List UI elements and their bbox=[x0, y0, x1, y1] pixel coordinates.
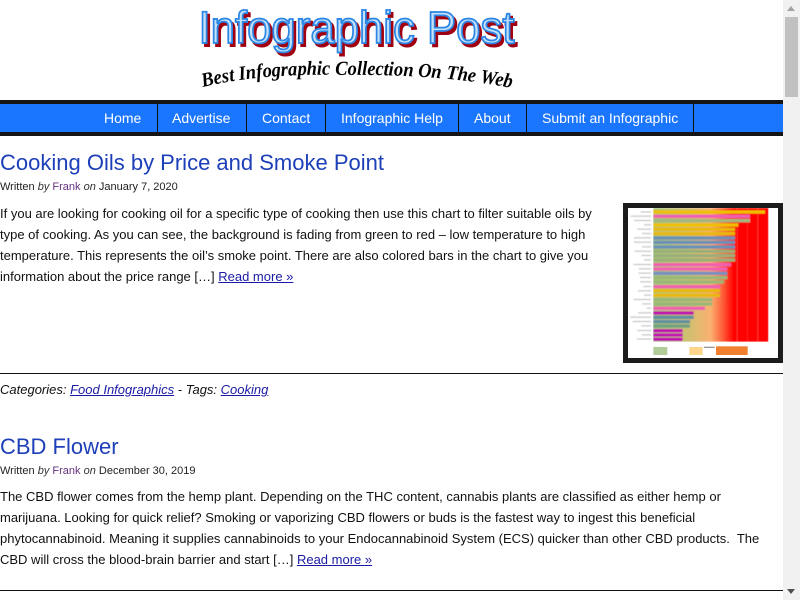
post 2 excerpt: The CBD flower comes from the hemp plant. Depending on the THC content, cannabis plants are classified as either hemp or bbox=[0, 489, 721, 504]
site logo: Infographic Post bbox=[198, 2, 515, 53]
nav item: Contact: Contact bbox=[262, 110, 310, 126]
post 1 byline: Written by Frank on January 7, 2020 bbox=[0, 181, 178, 193]
post 2 excerpt bbox=[0, 489, 759, 567]
post 2 excerpt: marijuana. Looking for quick relief? Smoking or vaporizing CBD flowers or buds is the fastest way to ingest this beneficial bbox=[0, 510, 695, 525]
post 2 excerpt: phytocannabinoid. Meaning it supplies cannabinoids to your Endocannabinoid System (ECS) quicker than other CBD products. The bbox=[0, 531, 759, 546]
scrollbar bbox=[783, 0, 800, 600]
nav item: Advertise: Advertise bbox=[172, 110, 230, 126]
site logo: Best Infographic Collection On The Web bbox=[202, 60, 512, 88]
post 1 excerpt: temperature. This represents the oil’s smoke point. There are also colored bars in the chart to give you bbox=[0, 248, 588, 263]
post 1 heading: Cooking Oils by Price and Smoke Point bbox=[0, 150, 384, 175]
nav item: About: About bbox=[474, 110, 511, 126]
post 1 excerpt: information about the price range […] Read more » bbox=[0, 269, 293, 284]
post 2 byline: Written by Frank on December 30, 2019 bbox=[0, 465, 196, 477]
post 1 thumbnail chart bbox=[623, 203, 783, 363]
nav item: Home: Home bbox=[104, 110, 141, 126]
post 1 excerpt: If you are looking for cooking oil for a specific type of cooking then use this chart to filter suitable oils by bbox=[0, 206, 592, 221]
post 1 excerpt: type of cooking. As you can see, the background is fading from green to red – low temperature to high bbox=[0, 227, 585, 242]
navigation bar bbox=[0, 100, 783, 136]
post 1 categories and tags: Categories: Food Infographics - Tags: Cooking bbox=[0, 382, 268, 397]
nav item: Infographic Help: Infographic Help bbox=[341, 110, 443, 126]
post 2 heading: CBD Flower bbox=[0, 434, 119, 459]
post 1 excerpt bbox=[0, 206, 592, 284]
site logo bbox=[198, 2, 518, 88]
post 2 excerpt: CBD will cross the blood-brain barrier and start […] Read more » bbox=[0, 552, 372, 567]
site logo: Infographic Post bbox=[201, 5, 517, 56]
nav item: Submit an Infographic: Submit an Infographic bbox=[542, 110, 678, 126]
